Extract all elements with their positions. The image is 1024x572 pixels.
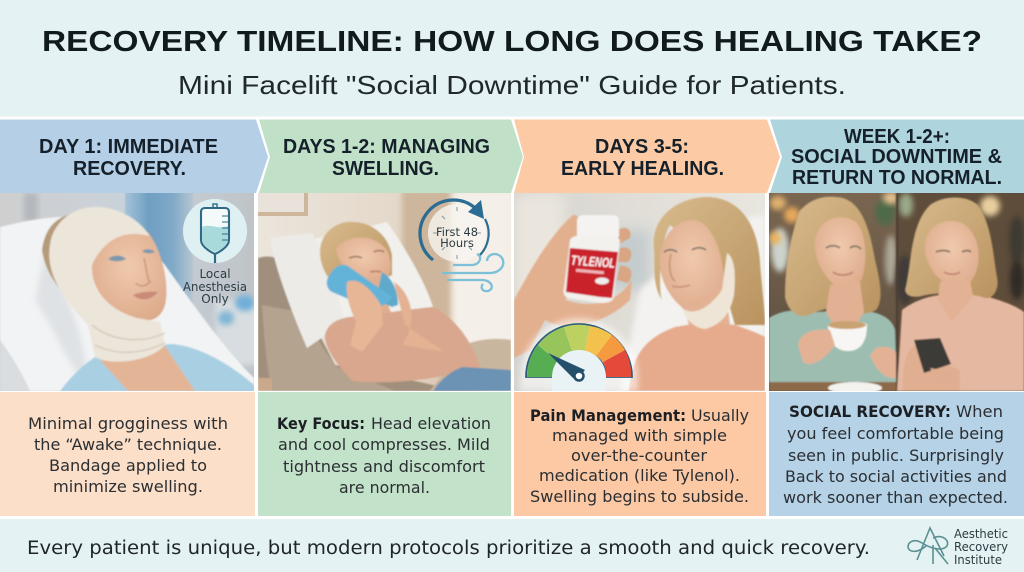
chevron: week 1-2+ heading: RETURN TO NORMAL. <box>792 167 1002 189</box>
text block: days 3-5: over-the-counter <box>571 446 707 465</box>
icon: 48 hour clock and wind: Hours <box>440 236 474 250</box>
text block: week 1-2+: seen in public. Surprisingly <box>788 446 1004 465</box>
title: RECOVERY TIMELINE: HOW LONG DOES HEALING TAKE? <box>42 26 982 58</box>
label: local anesthesia only: Local <box>199 267 231 281</box>
text block: week 1-2+: Back to social activities and <box>785 467 1007 486</box>
text block: days 1-2: Key Focus: <box>277 414 365 433</box>
subtitle: Mini Facelift "Social Downtime" Guide for Patients. <box>178 70 846 100</box>
text block: days 3-5: managed with simple <box>552 426 727 445</box>
photo: bandaged patient in hospital bed <box>0 190 260 391</box>
panel: week 1-2+ <box>769 120 1024 516</box>
label: local anesthesia only: Only <box>201 292 229 306</box>
text block: day 1: minimize swelling. <box>53 477 203 496</box>
photo: patient with pain medication and chin strap: TYLENOL <box>571 253 615 271</box>
text block: days 3-5: Usually <box>691 406 749 425</box>
header band <box>0 0 1024 116</box>
logo: wordmark: Institute <box>954 552 1002 567</box>
chevron: week 1-2+ heading <box>770 120 1024 193</box>
text block: days 3-5: Pain Management: <box>530 406 686 425</box>
label: local anesthesia only: Anesthesia <box>183 280 247 294</box>
label: local anesthesia only <box>183 267 247 306</box>
text block: days 3-5: Swelling begins to subside. <box>530 487 749 506</box>
photo: patient with pain medication and chin strap <box>514 193 765 391</box>
chevron: day 1 heading: RECOVERY. <box>73 158 186 180</box>
chevron: day 1 heading <box>0 120 268 193</box>
gauge: pain meter <box>520 318 638 391</box>
footer band <box>0 519 1024 572</box>
icon: 48 hour clock and wind <box>420 200 503 291</box>
chevron: days 1-2 heading <box>259 120 523 193</box>
text block: day 1: Bandage applied to <box>49 456 207 475</box>
text block: week 1-2+: you feel comfortable being <box>787 424 1004 443</box>
footer message: Every patient is unique, but modern protocols prioritize a smooth and quick recovery. <box>27 538 870 559</box>
logo: wordmark: Aesthetic <box>954 526 1008 541</box>
text block: week 1-2+: SOCIAL RECOVERY: <box>789 402 951 421</box>
icon: 48 hour clock and wind: First 48 <box>436 225 478 239</box>
text block: day 1: the “Awake” technique. <box>34 435 222 454</box>
photo: patient with cold compress in recliner <box>258 190 512 391</box>
text block: days 1-2: and cool compresses. Mild <box>278 435 490 454</box>
text block: days 3-5 <box>514 392 766 516</box>
text block: week 1-2+: When <box>956 402 1003 421</box>
logo: AR monogram <box>908 528 948 564</box>
logo: wordmark <box>954 526 1009 567</box>
text block: days 1-2: are normal. <box>339 478 430 497</box>
logo: wordmark: Recovery <box>954 539 1009 554</box>
chevron: days 1-2 heading: SWELLING. <box>332 158 439 180</box>
panel: day 1 <box>0 120 268 516</box>
chevron: days 3-5 heading: DAYS 3-5: <box>595 136 689 158</box>
text block: day 1 <box>0 392 255 516</box>
panel: days 1-2 <box>258 120 523 516</box>
text block: days 1-2 <box>258 392 511 516</box>
panel: days 3-5 <box>514 120 780 516</box>
chevron: days 3-5 heading: EARLY HEALING. <box>561 158 724 180</box>
chevron: days 1-2 heading: DAYS 1-2: MANAGING <box>283 136 490 158</box>
text block: day 1: Minimal grogginess with <box>28 414 228 433</box>
chevron: week 1-2+ heading: SOCIAL DOWNTIME & <box>791 146 1002 168</box>
chevron: days 3-5 heading <box>514 120 780 193</box>
text block: week 1-2+: work sooner than expected. <box>783 488 1008 507</box>
text block: week 1-2+ <box>769 392 1024 516</box>
text block: days 1-2: Head elevation <box>371 414 491 433</box>
text block: days 3-5: medication (like Tylenol). <box>539 466 740 485</box>
chevron: day 1 heading: DAY 1: IMMEDIATE <box>39 136 218 158</box>
photo: woman with coffee and woman with phone in cafe <box>769 192 1024 394</box>
icon: IV bag <box>183 199 247 263</box>
chevron: week 1-2+ heading: WEEK 1-2+: <box>844 126 950 148</box>
text block: days 1-2: tightness and discomfort <box>283 457 485 476</box>
